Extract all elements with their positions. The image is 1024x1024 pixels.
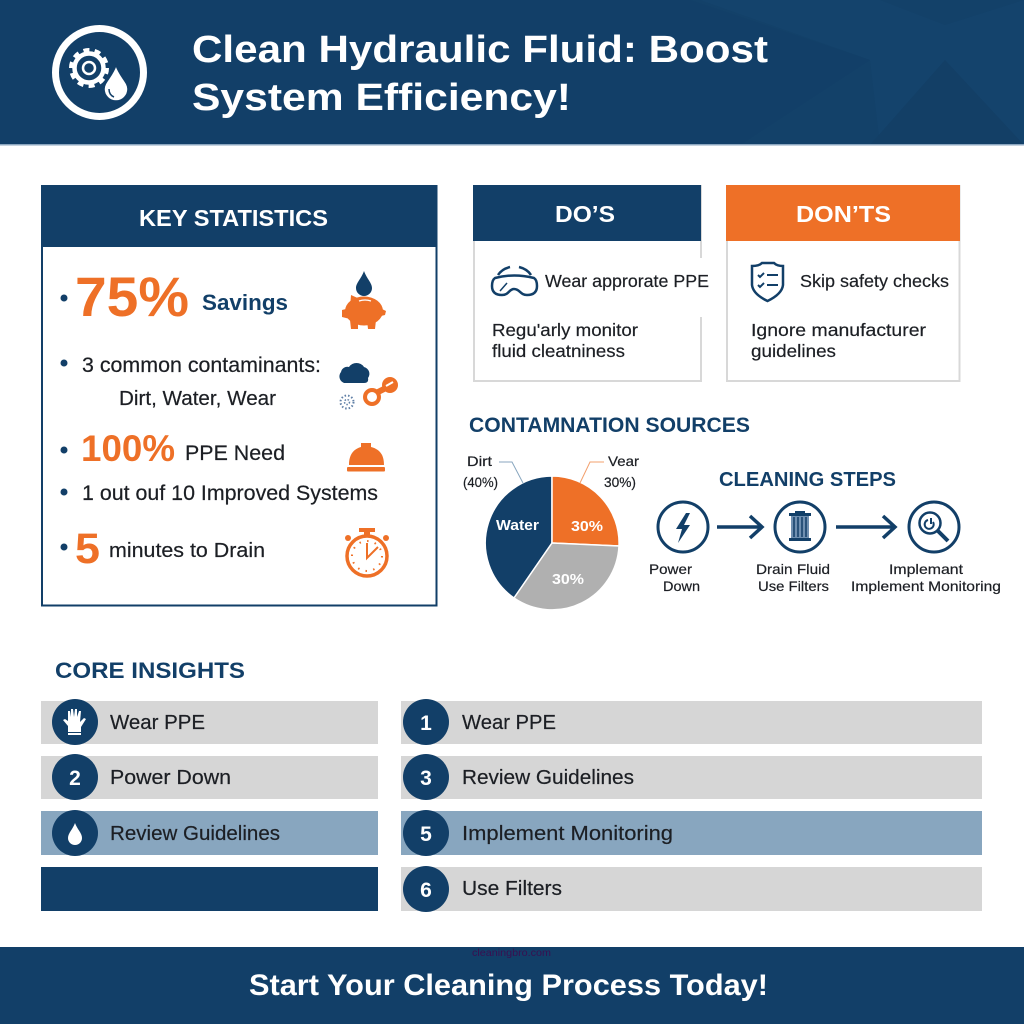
step 1: power down: [649, 502, 708, 594]
step 3: implement monitoring: [851, 502, 1001, 594]
heading: don'ts: DON’TS: [796, 201, 891, 227]
insight row: 6 use filters: 6: [420, 879, 432, 902]
stat: 5 minutes to drain: 5: [75, 525, 100, 573]
insight row: 6 use filters: [401, 866, 982, 912]
pie chart: contamination sources: 30%: [552, 571, 584, 588]
stat: 5 minutes to drain: [75, 525, 265, 573]
insight row: power down: 2: [69, 767, 81, 790]
title: Clean Hydraulic Fluid: Boost: [192, 29, 768, 71]
title: System Efficiency!: [192, 77, 571, 119]
header banner: [0, 0, 1024, 146]
pie label: wear: [580, 453, 639, 490]
icon: hard hat: [347, 443, 385, 472]
heading: do's: DO’S: [555, 201, 615, 227]
insight row: power down: Power Down: [110, 767, 231, 789]
step 3: implement monitoring: Implement Monitoring: [851, 578, 1001, 594]
insight row: power down: [41, 754, 378, 800]
heading: key statistics: KEY STATISTICS: [139, 205, 328, 231]
call to action: Start Your Cleaning Process Today!: [249, 969, 768, 1002]
insight row: 3 review guidelines: Review Guidelines: [462, 767, 634, 789]
icon: stopwatch: [345, 528, 389, 576]
pie label: dirt: Dirt: [467, 453, 492, 469]
text: ignore guidelines: guidelines: [751, 341, 836, 361]
icon: safety goggles: [492, 267, 537, 295]
stat: common contaminants: 3 common contaminants:: [82, 354, 321, 377]
pie label: dirt: [463, 453, 523, 490]
pie chart: contamination sources: 30%: [571, 518, 603, 535]
heading: cleaning steps: CLEANING STEPS: [719, 469, 896, 491]
step 2: drain fluid, use filters: [756, 502, 830, 594]
stat: 100% PPE need: PPE Need: [185, 442, 285, 465]
insight row: review guidelines, drop: [41, 810, 378, 856]
stat: improved systems: 1 out ouf 10 Improved Systems: [82, 482, 378, 505]
footer banner: [0, 947, 1024, 1024]
watermark: cleaningbro.com: [472, 948, 551, 959]
step 2: drain fluid, use filters: Drain Fluid: [756, 561, 830, 577]
pie label: wear: Vear: [608, 453, 639, 469]
pie label: wear: 30%): [604, 474, 636, 490]
stat: 75% savings: [75, 265, 288, 328]
panel: key statistics: [41, 185, 437, 606]
text: monitor fluid: [492, 320, 638, 361]
stat: 5 minutes to drain: minutes to Drain: [109, 540, 265, 562]
insight row: 5 implement monitoring: 5: [420, 823, 432, 846]
insight row: 5 implement monitoring: [401, 810, 982, 856]
icon: gear and fluid drop: [56, 28, 144, 116]
insight row: review guidelines, drop: Review Guidelines: [110, 823, 280, 845]
text: ignore guidelines: [751, 320, 926, 361]
insight row: wear PPE, glove: [41, 699, 378, 745]
stat: common contaminants: Dirt, Water, Wear: [119, 388, 276, 410]
heading: contamination sources: CONTAMNATION SOURCES: [469, 413, 750, 437]
icon: checklist shield: [752, 263, 783, 301]
title: [192, 29, 768, 119]
insight row: wear PPE, glove: Wear PPE: [110, 712, 205, 734]
stat: common contaminants: [82, 354, 321, 410]
text: wear PPE: Wear approrate PPE: [545, 271, 709, 291]
heading: core insights: CORE INSIGHTS: [55, 658, 245, 683]
insight row: empty navy bar: [41, 867, 378, 911]
insight row: 3 review guidelines: [401, 754, 982, 800]
pie label: dirt: (40%): [463, 474, 498, 490]
insight row: 3 review guidelines: 3: [420, 767, 432, 790]
insight row: 6 use filters: Use Filters: [462, 878, 562, 900]
arrow: step 1 to 2: [717, 516, 762, 538]
text: ignore guidelines: Ignore manufacturer: [751, 320, 926, 340]
text: skip checks: Skip safety checks: [800, 271, 949, 291]
step 3: implement monitoring: Implemant: [889, 561, 963, 577]
step 1: power down: Down: [663, 578, 700, 594]
arrow: step 2 to 3: [836, 516, 895, 538]
stat: 100% PPE need: [81, 428, 285, 469]
pie chart: contamination sources: Water: [496, 517, 539, 534]
stat: 75% savings: 75%: [75, 265, 189, 328]
bullet markers: [60, 294, 68, 550]
insight row: 1 wear PPE: Wear PPE: [462, 712, 556, 734]
insight row: 5 implement monitoring: Implement Monitoring: [462, 823, 673, 845]
insight row: 1 wear PPE: [401, 699, 982, 745]
pie chart: contamination sources: [463, 453, 639, 610]
step 2: drain fluid, use filters: Use Filters: [758, 578, 829, 594]
text: monitor fluid: Regu'arly monitor: [492, 320, 638, 340]
insight row: 1 wear PPE: 1: [420, 712, 432, 735]
stat: 100% PPE need: 100%: [81, 428, 175, 469]
text: monitor fluid: fluid cleatniness: [492, 341, 625, 361]
icon: contaminants cloud, particles, wrench: [339, 363, 398, 408]
icon: drop over piggy bank: [342, 271, 386, 329]
panel: do's: [473, 185, 709, 381]
stat: 75% savings: Savings: [202, 290, 288, 315]
panel: don'ts: [726, 185, 960, 381]
step 1: power down: Power: [649, 561, 692, 577]
